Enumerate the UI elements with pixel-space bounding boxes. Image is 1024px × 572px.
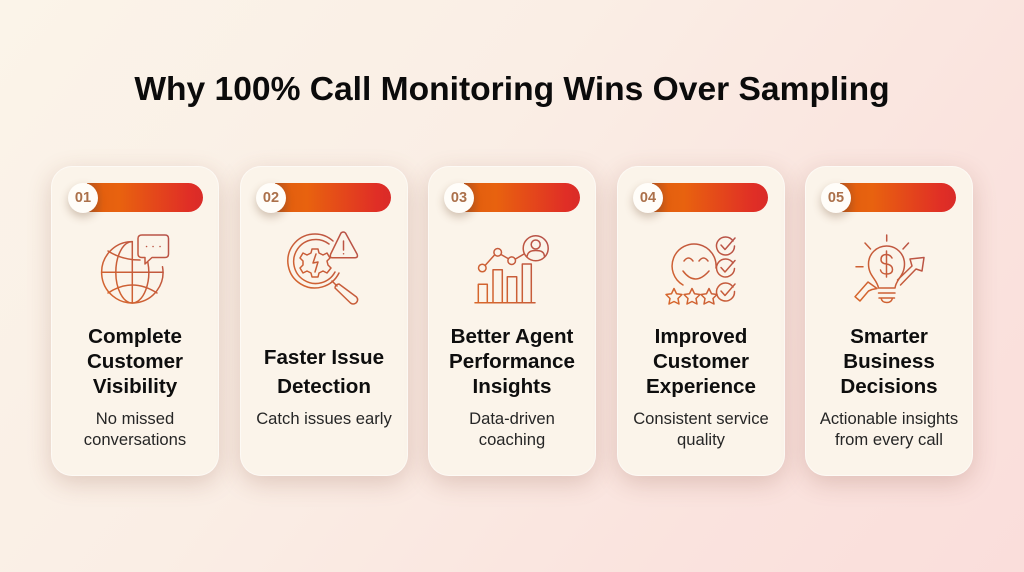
description: No missed [96,409,174,428]
number bar 02 [275,183,391,212]
number badge 04: 04 [640,190,656,206]
number badge 02 [256,183,286,213]
heading: Faster Issue [264,346,384,369]
description [84,409,186,449]
number badge 05 [821,183,851,213]
heading: Decisions [840,375,938,398]
number badge 02: 02 [263,190,279,206]
number bar 01 [87,183,203,212]
number badge 04 [633,183,663,213]
heading [264,346,384,398]
heading: Detection [277,375,371,398]
description [633,409,769,449]
description: coaching [479,430,545,449]
description: Catch issues early [256,409,392,428]
heading: Visibility [93,375,177,398]
panel: faster issue detection [240,166,408,476]
icon: globe with speech bubble [100,234,170,304]
description: quality [677,430,725,449]
heading: Experience [646,375,756,398]
heading: Insights [473,375,551,398]
heading: Improved [655,325,747,348]
heading [87,325,183,398]
number badge 03: 03 [451,190,467,206]
description [469,409,555,449]
panel: smarter business decisions [805,166,973,476]
heading: Smarter [850,325,928,348]
heading: Customer [653,350,749,373]
panel: complete customer visibility [51,166,219,476]
number bar 03 [464,183,580,212]
heading: Customer [87,350,183,373]
number badge 05: 05 [828,190,844,206]
heading [840,325,938,398]
description: Data-driven [469,409,555,428]
title: Why 100% Call Monitoring Wins Over Sampling [134,71,890,108]
heading: Complete [88,325,182,348]
heading [646,325,756,398]
description: conversations [84,430,186,449]
panel: better agent performance insights [428,166,596,476]
panel: improved customer experience [617,166,785,476]
heading [449,325,575,398]
icon: bar chart with agent [474,235,549,304]
number badge 01: 01 [75,190,91,206]
number bar 05 [840,183,956,212]
icon: magnifier with gear and warning [287,231,358,305]
description: from every call [835,430,943,449]
icon: smiley with stars and checks [665,236,736,305]
description: Consistent service [633,409,769,428]
heading: Business [843,350,935,373]
description: Actionable insights [820,409,958,428]
number badge 03 [444,183,474,213]
number badge 01 [68,183,98,213]
number bar 04 [652,183,768,212]
icon: light bulb with dollar and growth arrow [854,234,925,304]
description [820,409,958,449]
heading: Performance [449,350,575,373]
heading: Better Agent [451,325,573,348]
